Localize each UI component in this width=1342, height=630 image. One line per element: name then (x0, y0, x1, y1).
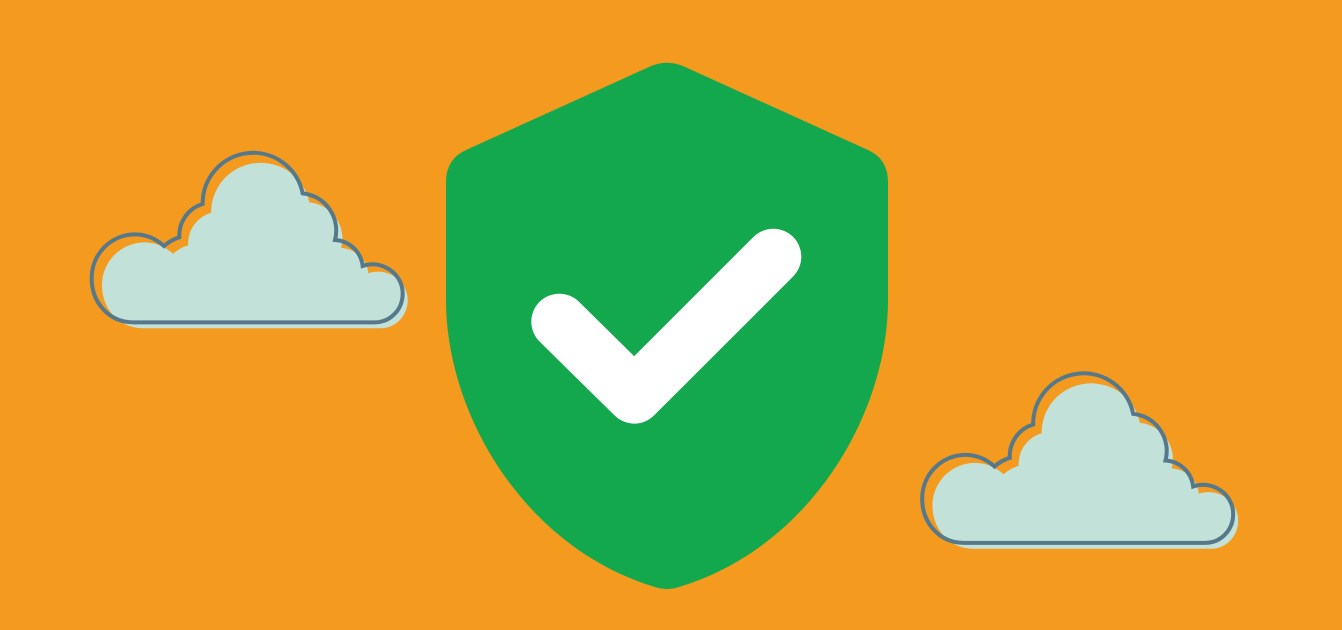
icon: green shield (446, 63, 888, 589)
icon: white check mark (559, 257, 773, 396)
icon: left cloud (92, 153, 408, 328)
icon: right cloud (922, 373, 1238, 549)
